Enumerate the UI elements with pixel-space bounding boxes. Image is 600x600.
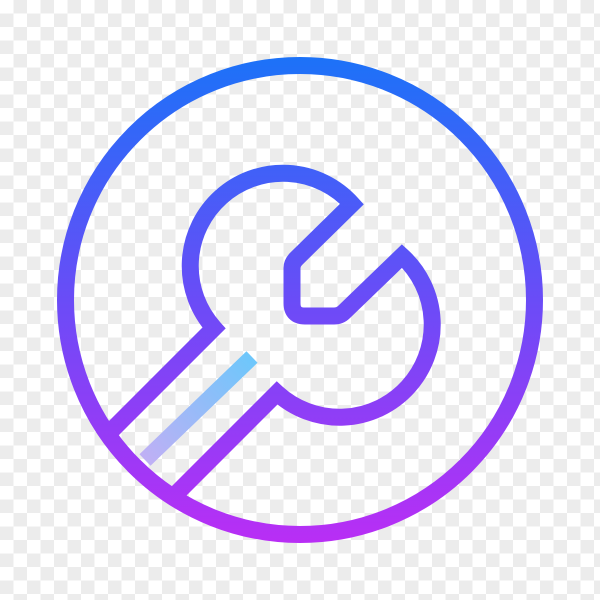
wrench outline [108, 173, 432, 497]
wrench handle highlight bar [145, 357, 252, 460]
outer circle [66, 66, 534, 534]
